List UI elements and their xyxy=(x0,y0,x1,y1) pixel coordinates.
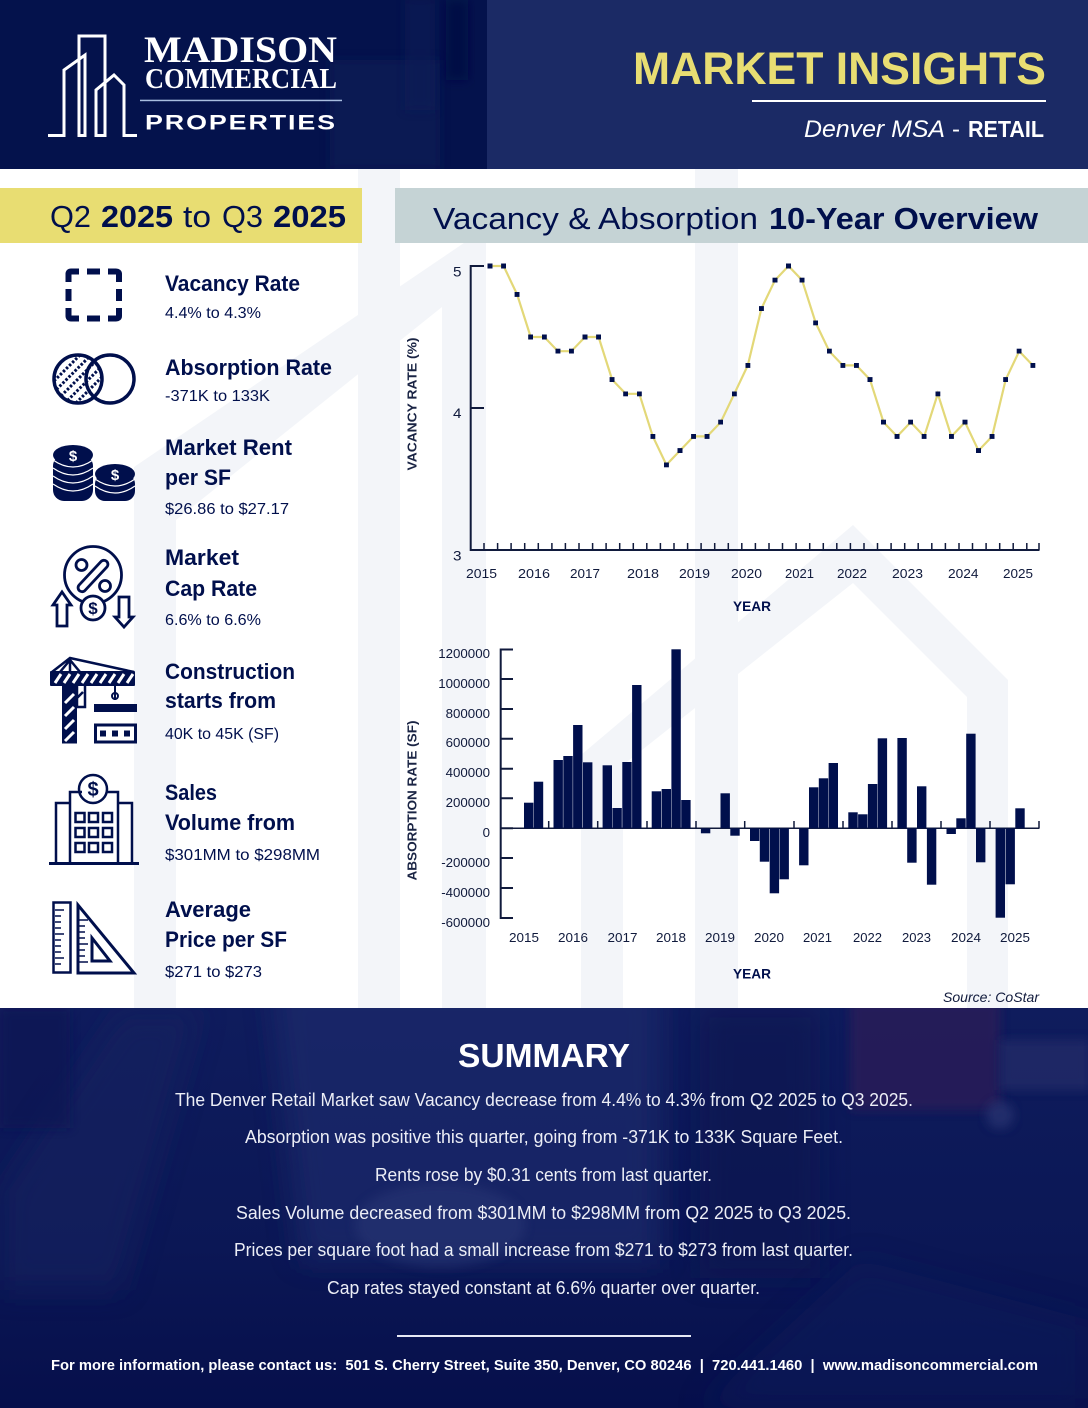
label: construction starts: Construction xyxy=(165,659,295,684)
x axis labels: 2016 xyxy=(558,930,588,945)
x axis labels: 2018 xyxy=(656,930,686,945)
label: construction starts: 40K to 45K (SF) xyxy=(165,726,279,743)
title: Market Insights: MARKET INSIGHTS xyxy=(633,43,1046,94)
y axis labels: -400000 xyxy=(441,885,490,900)
icon: city skyline outline xyxy=(48,36,137,136)
x axis labels: 2019 xyxy=(705,930,735,945)
x axis labels: 2016 xyxy=(518,566,550,581)
label: sales volume: $301MM to $298MM xyxy=(165,847,320,864)
x axis labels: 2022 xyxy=(853,930,882,945)
metric: absorption rate xyxy=(54,355,332,405)
x axis labels: 2020 xyxy=(754,930,784,945)
header band xyxy=(0,0,1088,169)
line chart: vacancy rate xyxy=(404,264,1040,614)
background watermark: building outline xyxy=(134,169,1008,1008)
y axis labels: 5 xyxy=(453,264,462,280)
x axis labels: 2025 xyxy=(1000,930,1030,945)
icon: tower crane xyxy=(50,658,137,744)
logo wordmark: MADISON xyxy=(144,30,337,71)
x axis labels: 2015 xyxy=(466,566,497,581)
x axis labels: 2021 xyxy=(785,566,814,581)
label: average price xyxy=(165,897,287,981)
label: average price: Price per SF xyxy=(165,927,287,952)
icon: coin stacks: $ xyxy=(69,448,78,465)
x axis title: year: YEAR xyxy=(733,966,771,982)
metric: average price xyxy=(54,897,287,981)
metric: sales volume xyxy=(49,775,320,864)
icon: dashed square xyxy=(68,272,119,318)
y axis labels: 800000 xyxy=(446,706,490,721)
footer contact line: For more information, please contact us: 501 S. Cherry Street, Suite 350, Denver, CO 80246 | 720.441.1460 | www.madisoncommercial.com xyxy=(51,1358,1038,1374)
heading: Vacancy and Absorption 10-Year Overview: 10-Year Overview xyxy=(769,201,1039,236)
x axis labels: 2024 xyxy=(951,930,981,945)
y axis labels: 0 xyxy=(483,825,490,840)
panel: key metrics list xyxy=(49,271,332,981)
y axis labels: 1200000 xyxy=(438,646,490,661)
label: absorption rate: -371K to 133K xyxy=(165,388,270,405)
summary text block: Absorption was positive this quarter, going from -371K to 133K Square Feet. xyxy=(245,1127,843,1147)
summary text block: The Denver Retail Market saw Vacancy decrease from 4.4% to 4.3% from Q2 2025 to Q3 2025. xyxy=(175,1090,913,1110)
summary heading: SUMMARY xyxy=(458,1037,630,1074)
icon: percent with arrows xyxy=(53,546,133,627)
label: market cap rate: Cap Rate xyxy=(165,576,257,601)
summary text block: Rents rose by $0.31 cents from last quarter. xyxy=(375,1165,712,1185)
label: market rent: Market Rent xyxy=(165,435,293,460)
icon: coin stacks xyxy=(53,445,135,501)
label: sales volume: Sales xyxy=(165,780,217,805)
heading: Q2 2025 to Q3 2025: Q2 xyxy=(50,199,91,234)
y axis labels: -600000 xyxy=(441,915,490,930)
x axis title: year: YEAR xyxy=(733,598,771,614)
label: vacancy rate: Vacancy Rate xyxy=(165,271,300,296)
x axis labels: 2017 xyxy=(570,566,600,581)
label: construction starts: starts from xyxy=(165,688,276,713)
x axis labels: 2022 xyxy=(837,566,867,581)
logo: Madison Commercial Properties xyxy=(48,30,342,136)
y axis labels: 600000 xyxy=(446,735,490,750)
label: absorption rate xyxy=(165,355,332,405)
y axis labels xyxy=(438,646,490,930)
icon: overlapping circles xyxy=(54,355,134,403)
heading: Q2 2025 to Q3 2025 xyxy=(0,188,362,243)
logo wordmark: COMMERCIAL xyxy=(145,64,337,95)
label: market rent xyxy=(165,435,293,518)
subtitle: Denver MSA - Retail: Denver MSA xyxy=(804,116,945,143)
metric: market cap rate xyxy=(53,545,261,629)
metric: vacancy rate xyxy=(68,271,300,322)
subtitle: Denver MSA - Retail: RETAIL xyxy=(968,116,1044,142)
summary text block: Sales Volume decreased from $301MM to $298MM from Q2 2025 to Q3 2025. xyxy=(236,1203,851,1223)
x axis labels xyxy=(466,566,1033,581)
y axis labels: 1000000 xyxy=(438,676,490,691)
y axis labels: 200000 xyxy=(446,795,490,810)
summary text block: Prices per square foot had a small increase from $271 to $273 from last quarter. xyxy=(234,1240,853,1260)
x axis labels: 2021 xyxy=(803,930,832,945)
heading: Vacancy and Absorption 10-Year Overview: Vacancy & Absorption xyxy=(433,201,758,236)
x axis labels: 2023 xyxy=(902,930,931,945)
icon: percent with arrows: $ xyxy=(88,599,98,618)
y axis labels: -200000 xyxy=(441,855,490,870)
label: vacancy rate xyxy=(165,271,300,322)
summary text block xyxy=(175,1090,913,1298)
label: construction starts xyxy=(165,659,295,743)
y axis labels: 400000 xyxy=(446,765,490,780)
label: sales volume: Volume from xyxy=(165,810,295,835)
x axis labels xyxy=(509,930,1030,945)
y axis labels: 4 xyxy=(453,405,462,421)
axes and ticks xyxy=(500,648,1040,919)
icon: coin stacks: $ xyxy=(111,467,120,484)
y axis title: absorption rate: ABSORPTION RATE (SF) xyxy=(404,720,420,880)
heading: Q2 2025 to Q3 2025: 2025 xyxy=(273,199,346,234)
x axis labels: 2020 xyxy=(731,566,762,581)
label: average price: $271 to $273 xyxy=(165,964,262,981)
icon: office building with dollar xyxy=(49,775,139,864)
x axis labels: 2015 xyxy=(509,930,539,945)
y axis labels: 3 xyxy=(453,548,462,564)
metric: construction starts xyxy=(50,658,295,744)
label: market cap rate xyxy=(165,545,261,629)
metric: market rent xyxy=(53,435,293,518)
logo wordmark xyxy=(140,30,342,134)
label: market rent: per SF xyxy=(165,465,231,490)
logo wordmark: PROPERTIES xyxy=(145,112,337,134)
x axis labels: 2018 xyxy=(627,566,659,581)
x axis labels: 2023 xyxy=(892,566,923,581)
summary text block: Cap rates stayed constant at 6.6% quarter over quarter. xyxy=(327,1278,760,1298)
x axis labels: 2019 xyxy=(679,566,710,581)
label: sales volume xyxy=(165,780,320,864)
source note: Source: CoStar xyxy=(943,989,1040,1005)
subtitle: Denver MSA - Retail: - xyxy=(952,116,960,143)
axes and ticks xyxy=(470,265,1040,551)
icon: office building with dollar: $ xyxy=(87,779,99,801)
bars xyxy=(524,649,1025,918)
label: absorption rate: Absorption Rate xyxy=(165,355,332,380)
label: market cap rate: Market xyxy=(165,545,240,570)
icon: ruler and set square xyxy=(54,902,134,973)
label: average price: Average xyxy=(165,897,251,922)
data line with square markers xyxy=(490,266,1033,465)
y axis labels xyxy=(453,264,462,564)
x axis labels: 2024 xyxy=(948,566,978,581)
heading: Q2 2025 to Q3 2025: to xyxy=(183,199,211,234)
y axis title: vacancy rate: VACANCY RATE (%) xyxy=(404,338,420,470)
heading: Q2 2025 to Q3 2025: 2025 xyxy=(101,199,173,234)
x axis labels: 2017 xyxy=(608,930,638,945)
label: market cap rate: 6.6% to 6.6% xyxy=(165,612,261,629)
subtitle: Denver MSA - Retail xyxy=(752,100,1046,143)
heading: Vacancy and Absorption 10-Year Overview xyxy=(395,188,1088,243)
footer background xyxy=(0,980,1088,1408)
x axis labels: 2025 xyxy=(1003,566,1033,581)
bar chart: absorption rate xyxy=(404,646,1040,982)
heading: Q2 2025 to Q3 2025: Q3 xyxy=(222,199,263,234)
label: market rent: $26.86 to $27.17 xyxy=(165,501,289,518)
label: vacancy rate: 4.4% to 4.3% xyxy=(165,305,261,322)
